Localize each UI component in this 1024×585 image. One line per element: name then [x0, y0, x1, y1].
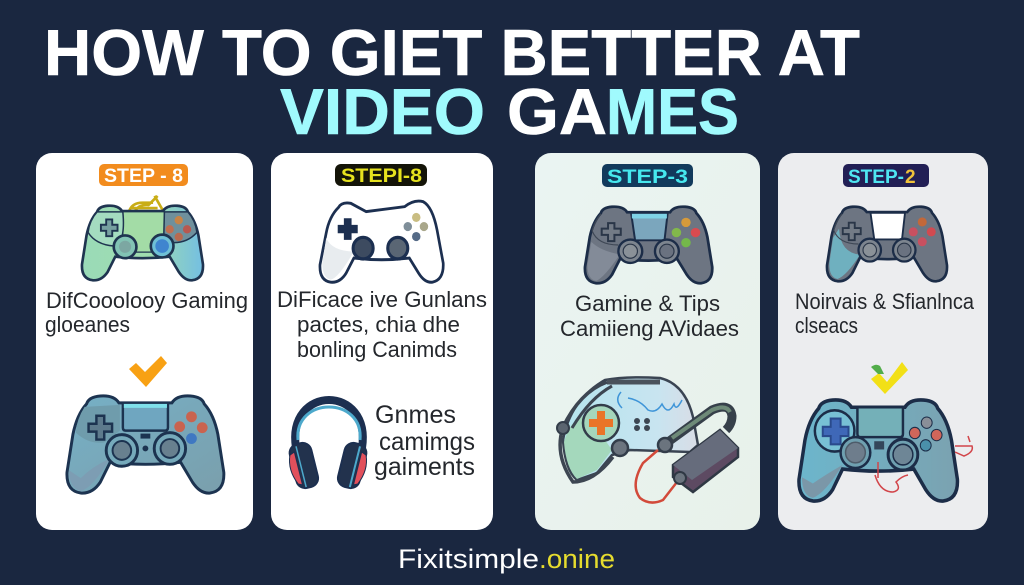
text: headphones caption: Gnmes	[375, 401, 456, 429]
icon: white controller	[320, 201, 443, 282]
text: card 2 description	[277, 287, 487, 362]
text: card 2 description: bonling Canimds	[297, 337, 457, 362]
icon: controller with cable and battery	[557, 377, 738, 503]
panel: card 3	[535, 153, 760, 530]
icon: yellow check mark	[871, 362, 908, 394]
text: card 3 description: Gamine & Tips	[575, 291, 720, 316]
text: card 2 description: pactes, chia dhe	[297, 312, 460, 337]
panel: card 4	[778, 153, 988, 530]
panel: card 1	[36, 153, 253, 530]
icon: pastel controller with yellow cable	[82, 196, 203, 280]
badge: step i-8: STEPI-8	[341, 166, 422, 187]
title: GA	[507, 75, 607, 148]
text: card 2 description: DiFicace ive Gunlans	[277, 287, 487, 312]
footer: site name: Fixitsimple	[398, 544, 539, 574]
badge: step 3: STEP-3	[607, 167, 688, 188]
icon: grey controller	[585, 207, 712, 283]
badge: step 3	[602, 164, 693, 188]
icon: blue controller	[67, 396, 224, 493]
text: card 3 description	[560, 291, 739, 341]
title	[44, 16, 860, 148]
text: card 4 description	[795, 289, 974, 338]
text: card 4 description: clseacs	[795, 313, 858, 338]
text: card 1 description	[45, 288, 248, 337]
icon: teal controller with red arrows	[799, 400, 972, 501]
text: card 1 description: gloeanes	[45, 312, 130, 337]
icon: headphones	[285, 400, 371, 491]
badge: step 2: 2	[905, 167, 916, 188]
panel: card 2	[271, 153, 493, 530]
title: MES	[606, 75, 739, 148]
text: headphones caption: camimgs	[379, 428, 475, 456]
text: card 1 description: DifCooolooy Gaming	[46, 288, 248, 313]
badge: step 2: STEP-	[848, 167, 904, 188]
text: card 4 description: Noirvais & Sfianlnca	[795, 289, 974, 314]
icon: orange check mark	[129, 356, 167, 387]
text: headphones caption: gaiments	[374, 453, 475, 481]
badge: step 8: STEP - 8	[104, 166, 183, 187]
badge: step 2	[843, 164, 929, 188]
text: card 3 description: Camiieng AVidaes	[560, 316, 739, 341]
footer: site name: .onine	[539, 544, 615, 574]
icon: grey controller with white touchpad	[827, 207, 947, 281]
footer: site name	[398, 544, 615, 574]
title: HOW TO GIET BETTER AT	[44, 16, 860, 89]
text: headphones caption	[374, 401, 475, 481]
title: VIDEO	[280, 75, 485, 148]
